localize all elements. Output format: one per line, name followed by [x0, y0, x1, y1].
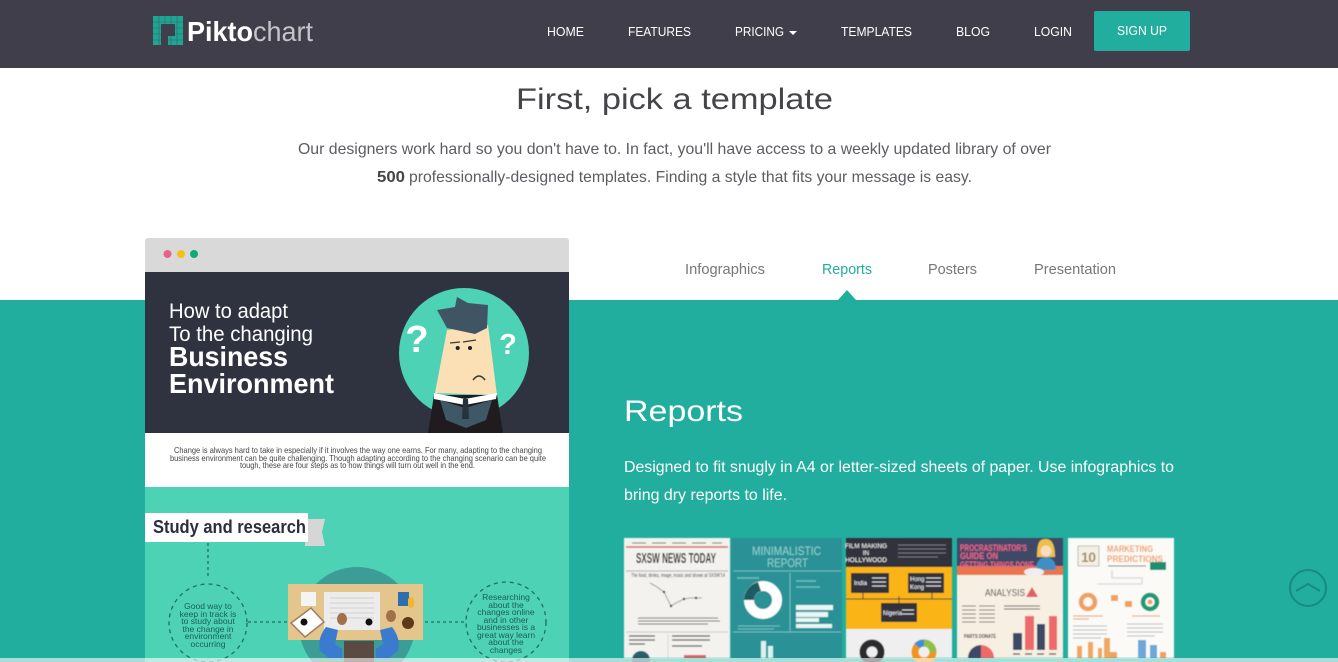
- thumbnail: minimalistic report: REPORT: [767, 556, 809, 570]
- callout: study circle: keep in track is: [180, 609, 236, 619]
- nav links: LOGIN: [1034, 24, 1072, 39]
- thumbnail: film making in Hollywood: Kong: [910, 585, 924, 591]
- nav links: [547, 24, 1072, 39]
- thumbnail: procrastinator's guide: [957, 538, 1063, 658]
- report introduction: [145, 433, 569, 487]
- callout: study circle: Good way to: [184, 601, 232, 611]
- callout: study circle: [169, 584, 247, 662]
- intro text: 500: [377, 169, 405, 186]
- thumbnail: film making in Hollywood: Hong: [910, 577, 924, 583]
- sign up button: [1094, 11, 1190, 51]
- thumbnail: procrastinator's guide: GETTING THINGS DONE: [960, 560, 1034, 570]
- thumbnail: film making in Hollywood: IN: [863, 550, 870, 557]
- report title: Environment: [169, 368, 334, 399]
- thumbnail: SXSW news today: SXSW NEWS TODAY: [636, 550, 716, 567]
- icon: confused businessman: [399, 288, 529, 433]
- thumbnail: procrastinator's guide: ANALYSIS: [985, 588, 1025, 599]
- callout: research circle: [466, 582, 546, 662]
- thumbnail: SXSW news today: [624, 538, 730, 662]
- report template thumbnails: [624, 538, 1174, 662]
- template category tabs: [685, 262, 1116, 278]
- callout: research circle: about the: [488, 600, 524, 610]
- report title: To the changing: [169, 323, 313, 346]
- report header panel: [145, 272, 569, 433]
- callout: research circle: about the: [488, 637, 524, 647]
- logo: Piktochart: Pikto: [187, 16, 253, 47]
- report introduction: tough, these are four steps as to how things will turn out well in the end.: [240, 460, 475, 470]
- browser title bar: [145, 238, 569, 272]
- report title: [169, 300, 334, 399]
- section description: bring dry reports to life.: [624, 487, 787, 504]
- section ribbon heading: Study and research: [153, 517, 306, 537]
- callout: study circle: environment: [185, 631, 232, 641]
- thumbnail: film making in Hollywood: [845, 538, 952, 661]
- thumbnail: marketing predictions: MARKETING: [1107, 544, 1153, 554]
- logo: Piktochart: chart: [253, 16, 313, 47]
- illustration: person at desk: [288, 567, 423, 662]
- intro text: Our designers work hard so you don't have to. In fact, you'll have access to a weekly updated library of over: [298, 141, 1052, 158]
- intro text: professionally-designed templates. Finding a style that fits your message is easy.: [409, 169, 972, 186]
- nav links: TEMPLATES: [841, 24, 912, 39]
- intro text: [298, 141, 1052, 186]
- callout: research circle: businesses is a: [477, 622, 535, 632]
- icon: scroll to top: [1290, 570, 1326, 606]
- teal section background: [0, 300, 1338, 662]
- section ribbon heading: [145, 513, 325, 546]
- report introduction: business environment can be quite challenging. Though adapting according to the changing scenario can be quite: [170, 453, 546, 463]
- template category tabs: Infographics: [685, 262, 765, 278]
- callout: research circle: great way learn: [477, 630, 535, 640]
- sign up button: SIGN UP: [1117, 24, 1167, 38]
- thumbnail: SXSW news today: The food, drinks, image, music and shows at SXSW'14: [631, 573, 725, 579]
- section description: Designed to fit snugly in A4 or letter-sized sheets of paper. Use infographics to: [624, 459, 1174, 476]
- report title: How to adapt: [169, 300, 288, 323]
- section description: [624, 459, 1174, 504]
- report title: Business: [169, 341, 288, 372]
- icon: confused businessman: ?: [405, 319, 429, 361]
- active tab pointer: [838, 290, 856, 300]
- thumbnail: minimalistic report: MINIMALISTIC: [752, 544, 821, 558]
- thumbnail: film making in Hollywood: HOLLYWOOD: [845, 557, 887, 564]
- thumbnail: procrastinator's guide: PROCRASTINATOR'S: [960, 543, 1027, 553]
- template category tabs: Presentation: [1034, 262, 1116, 278]
- template category tabs: Posters: [928, 262, 977, 278]
- thumbnail: film making in Hollywood: FILM MAKING: [845, 543, 887, 550]
- panel: browser window with report preview: [145, 238, 569, 662]
- thumbnail: marketing predictions: PREDICTIONS: [1107, 554, 1163, 564]
- icon: confused businessman: ?: [499, 329, 517, 361]
- template category tabs: Reports: [822, 262, 872, 278]
- nav links: PRICING: [735, 24, 784, 39]
- callout: study circle: to study about: [181, 616, 235, 626]
- callout: study circle: occurring: [191, 639, 226, 649]
- panel: study and research section: [145, 487, 569, 662]
- thumbnail: film making in Hollywood: Nigeria: [883, 611, 903, 617]
- nav links: BLOG: [956, 24, 990, 39]
- thumbnail: film making in Hollywood: India: [854, 581, 868, 587]
- callout: research circle: and in other: [484, 615, 529, 625]
- thumbnail: minimalistic report: [731, 538, 842, 658]
- navigation bar: [0, 0, 1338, 68]
- thumbnail: marketing predictions: [1068, 538, 1174, 658]
- thumbnail: procrastinator's guide: GUIDE ON: [960, 551, 998, 561]
- callout: study circle: the change in: [182, 624, 234, 634]
- logo: Piktochart: [153, 16, 313, 47]
- callout: research circle: changes online: [477, 607, 535, 617]
- nav links: FEATURES: [628, 24, 691, 39]
- thumbnail: procrastinator's guide: PARTS DONATE: [964, 634, 996, 640]
- nav links: HOME: [547, 24, 584, 39]
- section heading: Reports: Reports: [624, 395, 743, 428]
- title: First, pick a template: [516, 83, 833, 116]
- thumbnail: marketing predictions: 10: [1081, 549, 1096, 565]
- report introduction: Change is always hard to take in especially if it involves the way one earns. For many, adapting to the changing: [174, 445, 542, 455]
- callout: research circle: Researching: [482, 592, 530, 602]
- callout: research circle: changes: [490, 645, 522, 655]
